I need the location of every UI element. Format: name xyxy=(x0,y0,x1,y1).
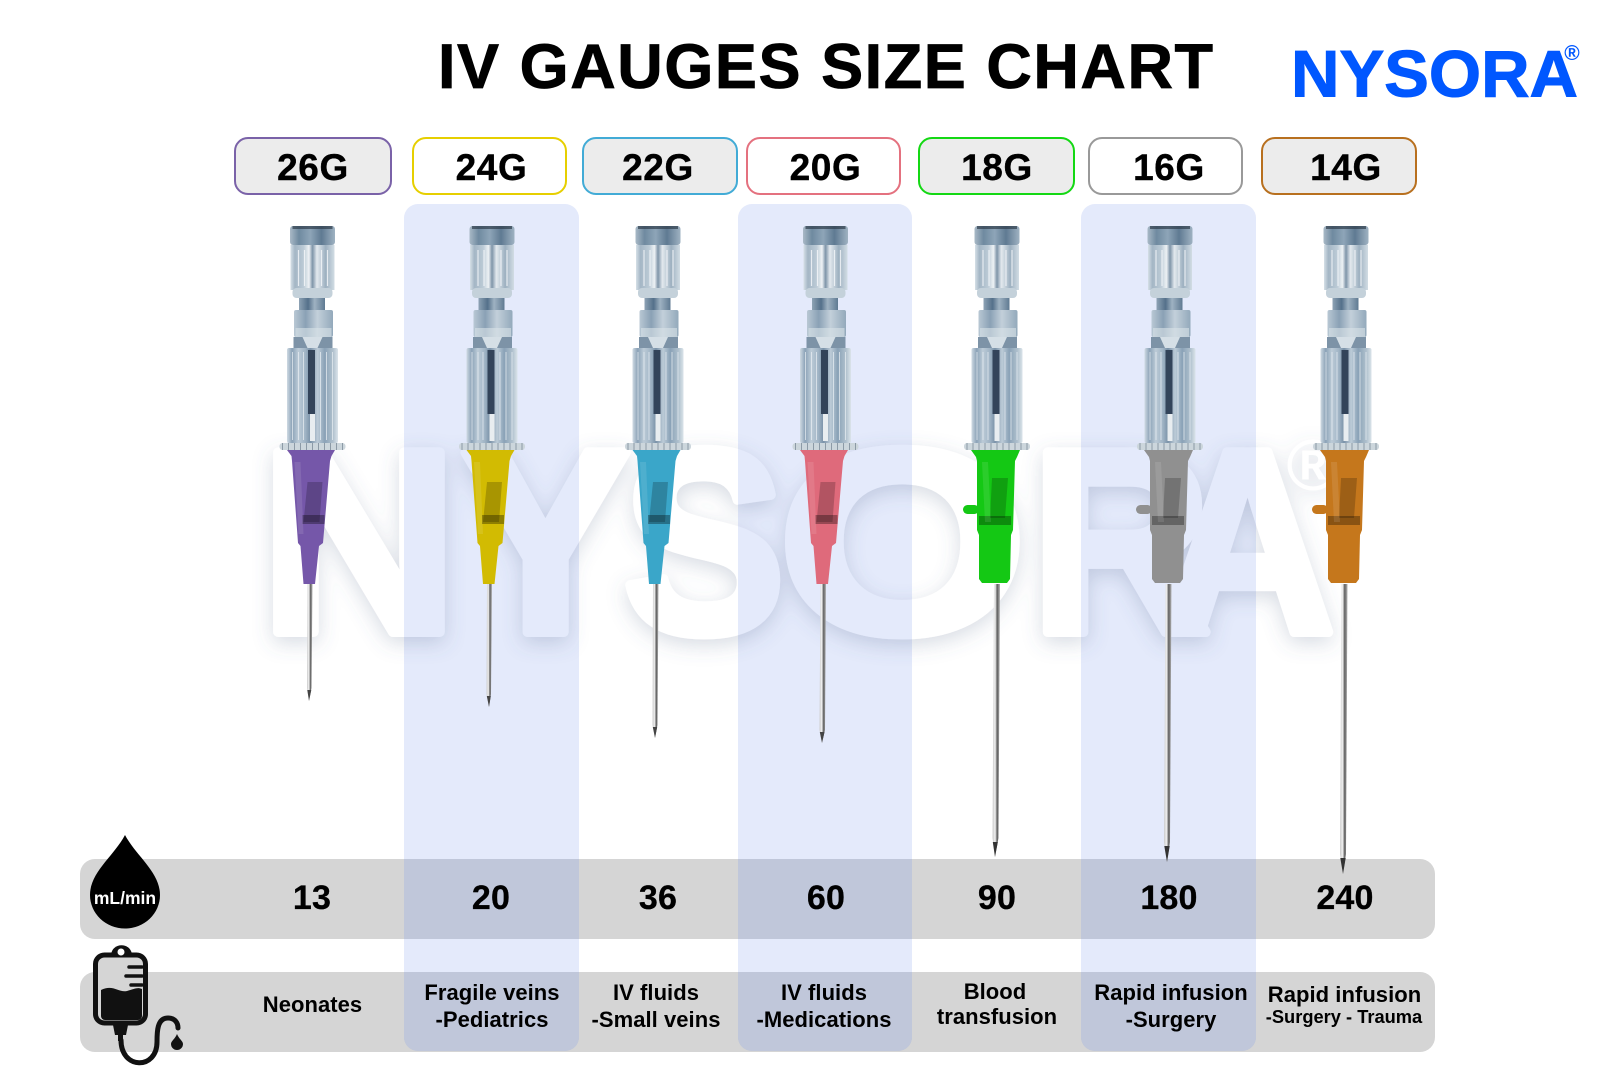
flow rate: 16G: 180 xyxy=(1140,879,1198,917)
highlight band: 20G column xyxy=(738,204,912,1051)
flow rate: 22G: 36 xyxy=(639,879,677,917)
badge: 24G: 24G xyxy=(456,147,527,188)
badge: 18G xyxy=(919,138,1074,194)
indication: 14G xyxy=(1266,982,1423,1027)
indication: 18G: Blood xyxy=(964,979,1026,1004)
indication: 24G: Fragile veins xyxy=(424,980,560,1005)
indication: 14G: -Surgery - Trauma xyxy=(1266,1006,1423,1027)
catheter: 20G pink xyxy=(792,226,858,743)
badge: 18G: 18G xyxy=(961,147,1033,188)
icon: drop with mL/min xyxy=(90,835,160,928)
catheter: 16G grey xyxy=(1136,226,1203,862)
indication: 16G: -Surgery xyxy=(1126,1007,1217,1032)
watermark: NYSORA: N xyxy=(260,397,458,688)
indication: 20G: -Medications xyxy=(756,1007,892,1032)
badge: 24G xyxy=(413,138,566,194)
badge: 14G: 14G xyxy=(1310,147,1382,188)
badge: 16G xyxy=(1089,138,1242,194)
flow rate: 18G: 90 xyxy=(978,879,1016,917)
badge: 22G xyxy=(583,138,737,194)
indication: 16G: Rapid infusion xyxy=(1094,980,1248,1005)
watermark: NYSORA: Y xyxy=(461,397,630,688)
icon: IV bag xyxy=(96,945,183,1063)
highlight band: 24G column xyxy=(404,204,579,1051)
badge: 16G: 16G xyxy=(1133,147,1205,188)
badge: 26G xyxy=(235,138,391,194)
panel: flow rate row background xyxy=(80,859,1435,939)
flow rate: 26G: 13 xyxy=(293,879,331,917)
watermark: NYSORA xyxy=(260,397,1340,688)
badge: 20G: 20G xyxy=(790,147,861,188)
flow rate: 24G: 20 xyxy=(472,879,510,917)
catheter: 14G orange xyxy=(1312,226,1379,874)
watermark: NYSORA: R xyxy=(1031,397,1211,688)
indication: 18G: transfusion xyxy=(937,1004,1057,1029)
indication: 24G: -Pediatrics xyxy=(435,1007,549,1032)
indication: 20G: IV fluids xyxy=(781,980,867,1005)
watermark: NYSORA: ® xyxy=(1286,426,1340,506)
badge: 20G xyxy=(747,138,900,194)
highlight band: 16G column xyxy=(1081,204,1256,1051)
catheter: 26G purple xyxy=(280,226,346,701)
catheter: 22G blue xyxy=(625,226,691,738)
logo: NYSORA: NYSORA xyxy=(1291,36,1578,110)
indication: 22G: -Small veins xyxy=(592,1007,720,1032)
badge: 26G: 26G xyxy=(277,147,349,188)
icon: drop with mL/min: mL/min xyxy=(94,888,156,908)
catheter: 24G yellow xyxy=(459,226,525,707)
panel: indications row background xyxy=(80,972,1435,1052)
catheter: 18G green xyxy=(963,226,1030,857)
flow rate: 20G: 60 xyxy=(807,879,845,917)
logo: NYSORA: ® xyxy=(1564,42,1580,65)
indication: 14G: Rapid infusion xyxy=(1268,982,1421,1007)
flow rate: 14G: 240 xyxy=(1316,879,1374,917)
indication: 22G: IV fluids xyxy=(613,980,699,1005)
badge: 22G: 22G xyxy=(622,147,694,188)
indication: 26G: Neonates xyxy=(263,992,362,1017)
title: IV GAUGES SIZE CHART xyxy=(438,32,1213,102)
watermark: NYSORA: S xyxy=(623,397,785,688)
watermark: NYSORA: A xyxy=(1160,397,1335,688)
badge: 14G xyxy=(1262,138,1416,194)
watermark: NYSORA: O xyxy=(778,397,1027,688)
